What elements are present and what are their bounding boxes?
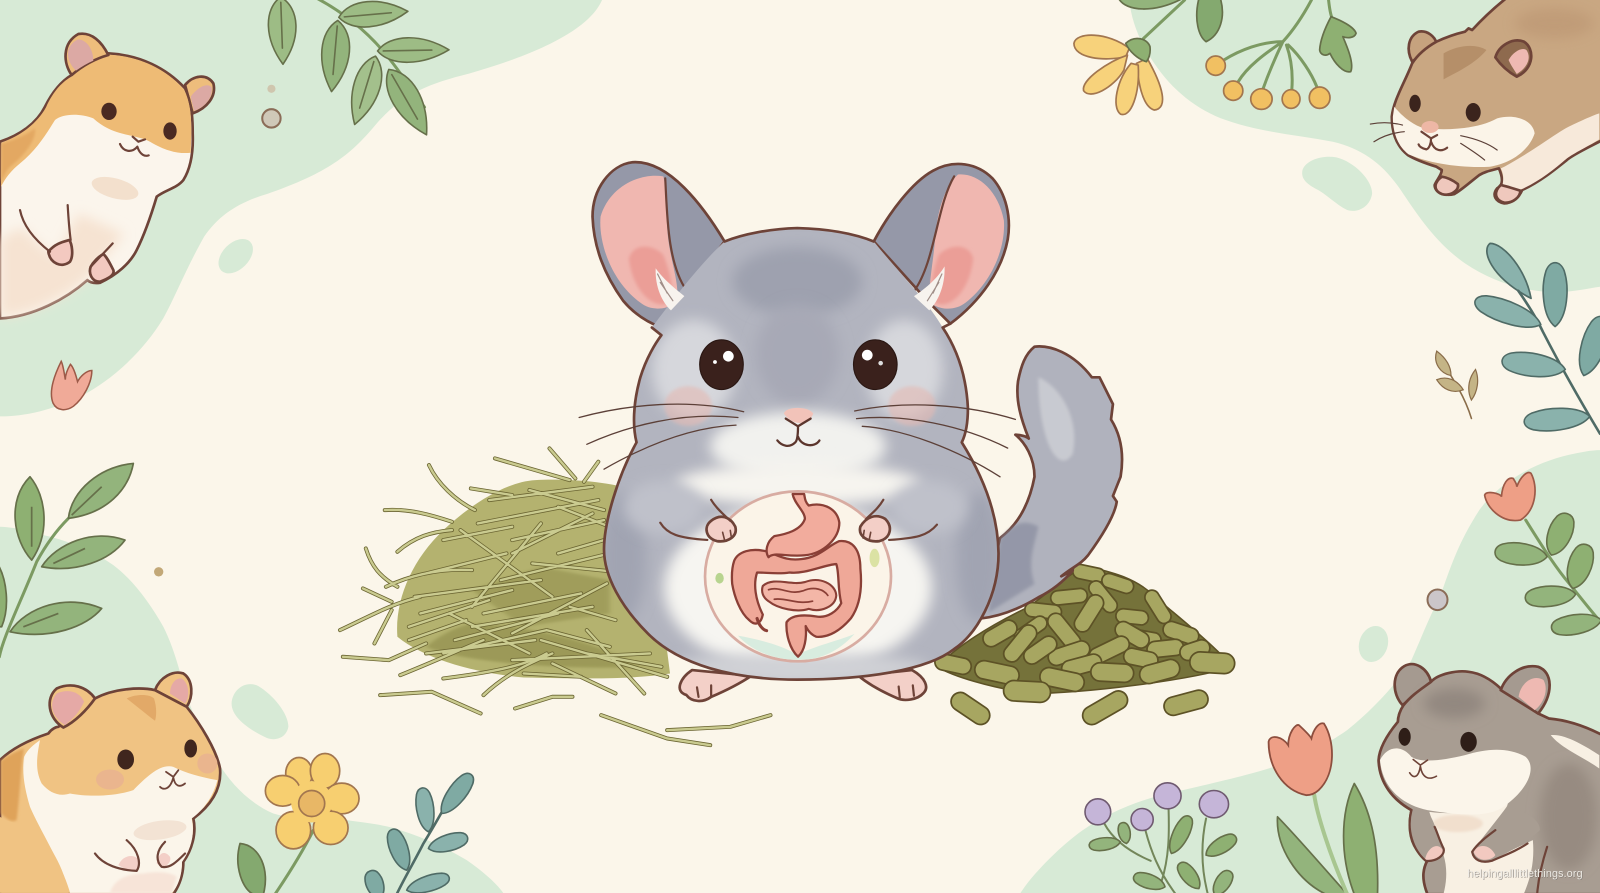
- mouth: [1410, 759, 1436, 778]
- left arm: [1410, 810, 1444, 861]
- icon: berry sprig: [1206, 0, 1330, 109]
- belly wash: [0, 213, 123, 317]
- plant: yellow flower: [238, 753, 359, 893]
- right arm: [1472, 805, 1540, 862]
- fur orange: [1, 55, 191, 187]
- flower stem: [1144, 0, 1185, 38]
- small intestine: [762, 580, 836, 610]
- ear right inner: [1509, 49, 1529, 74]
- green blob: bottom right: [1020, 450, 1600, 893]
- small green spot: lower left: [232, 684, 288, 739]
- belly tint: [1433, 815, 1483, 832]
- loose pellets: [948, 688, 1210, 728]
- paws: [118, 856, 140, 871]
- chinchilla: [579, 162, 1122, 701]
- paw right: [860, 516, 890, 541]
- body: [600, 228, 1002, 683]
- plant: purple sprigs: [1085, 783, 1240, 893]
- stomach: [767, 494, 839, 557]
- watermark: helpingalllittlethings.org: [1468, 869, 1583, 881]
- pellets: [933, 563, 1235, 703]
- paw left: [707, 517, 736, 541]
- eyes: [101, 103, 117, 120]
- paws: [48, 240, 72, 265]
- plant: teal branch: [362, 769, 478, 893]
- hay shadow: [426, 623, 638, 668]
- hamster: top right: [1370, 0, 1600, 203]
- head wash: [1424, 688, 1485, 718]
- belly circle: [705, 491, 891, 661]
- body: [0, 53, 193, 318]
- feet: [1435, 177, 1458, 195]
- leaf: [1197, 0, 1222, 42]
- hay shadow upper: [472, 567, 610, 627]
- green blob: top left: [0, 0, 602, 416]
- belly circle with digestive organs: [705, 491, 891, 661]
- body outline: [604, 228, 999, 680]
- watermark: helpingalllittlethings.org: [1467, 868, 1583, 880]
- straw highlights: [340, 448, 770, 745]
- back wash: [1515, 8, 1594, 38]
- cheek blush left: [664, 386, 712, 426]
- icon: yellow flower: [1074, 35, 1163, 115]
- back shade: [1, 748, 24, 821]
- ear left inner: [52, 691, 84, 725]
- foot right: [858, 670, 926, 700]
- body: [0, 689, 220, 893]
- muzzle: [1393, 107, 1535, 167]
- plant: left branch: [0, 463, 133, 657]
- ear right: [874, 164, 1009, 324]
- mouth: [777, 419, 819, 446]
- straw outlines: [340, 448, 770, 745]
- ear tuft right: [914, 266, 945, 310]
- teal leaf top of right branch: [1487, 243, 1531, 298]
- ear left: [1409, 31, 1436, 62]
- ear left: [1395, 664, 1431, 705]
- muzzle: [1380, 748, 1531, 815]
- ear right: [185, 77, 214, 113]
- belly: [1429, 803, 1533, 893]
- tail wash dark: [989, 523, 1038, 613]
- eyes: [1409, 95, 1421, 112]
- fur washes: [600, 247, 1002, 683]
- plant: right tulip branch: [1485, 473, 1600, 638]
- ear tuft left: [656, 268, 684, 310]
- head patch: [127, 695, 156, 721]
- nose blush: [1421, 121, 1439, 133]
- plant: big tulip: [1269, 723, 1378, 893]
- ear right inner: [1519, 678, 1546, 710]
- eyes: [117, 749, 134, 769]
- pellet pile: [933, 563, 1235, 728]
- chest mark: [89, 173, 141, 204]
- cheek blush: [96, 769, 124, 789]
- hay pile: [340, 448, 770, 745]
- mouth: [1419, 132, 1447, 150]
- green wash: [738, 634, 855, 660]
- green blob: top right: [1129, 0, 1600, 292]
- fur shade: [1, 128, 35, 182]
- belly line: [1537, 847, 1547, 893]
- small green spot: upper right: [1302, 157, 1372, 211]
- ear left: [50, 685, 95, 727]
- ear right: [1501, 666, 1550, 713]
- bottom right corner details: [1085, 473, 1600, 893]
- white chest: [23, 740, 217, 893]
- cheek blush right: [888, 386, 936, 426]
- ear inner right: [191, 85, 212, 111]
- small green spot: lower right: [1354, 622, 1393, 666]
- top right corner details: [1074, 0, 1600, 298]
- leaf: [1119, 0, 1183, 9]
- ear right inner: [170, 678, 188, 703]
- large intestine: [732, 541, 861, 657]
- decorative dot: [154, 567, 163, 576]
- body wash: [1540, 763, 1597, 870]
- decorative dots: top left: [262, 85, 281, 128]
- hamster: bottom right: [1379, 664, 1600, 893]
- arm lines: [95, 840, 185, 871]
- ear left: [66, 34, 108, 75]
- ear right: [1495, 40, 1531, 77]
- hamster: top left: [0, 34, 214, 318]
- tail wash light: [1038, 377, 1074, 461]
- belly: [1501, 113, 1599, 190]
- nose: [784, 408, 813, 423]
- foot left: [680, 670, 751, 701]
- paw tints: [1425, 846, 1443, 860]
- plant: right teal branch: [1471, 263, 1600, 434]
- icon: small sprig: [1436, 351, 1478, 418]
- body: [1392, 0, 1600, 203]
- green blob: bottom left: [0, 527, 503, 893]
- decorative dot: [1428, 589, 1448, 610]
- side stripe: [1551, 735, 1599, 768]
- arm outlines: [1410, 810, 1528, 862]
- icon: tulip bud left: [51, 361, 92, 410]
- eye right: [853, 340, 897, 390]
- appendix: [757, 618, 767, 631]
- lobed leaf: [1320, 0, 1356, 72]
- bottom left corner details: [0, 463, 478, 893]
- plant: top left branch: [267, 0, 449, 141]
- hamster: bottom left: [0, 673, 220, 893]
- eye left: [700, 340, 743, 390]
- small green spot: upper left: [212, 232, 260, 280]
- pile base: [937, 566, 1233, 693]
- head patch: [1444, 46, 1486, 79]
- tail: [981, 346, 1122, 618]
- eyes: [1399, 728, 1411, 746]
- chest mark: [132, 817, 188, 843]
- ear left: [593, 162, 725, 328]
- food specks: [715, 573, 724, 584]
- belly tint: [110, 872, 177, 893]
- whiskers: [1370, 123, 1497, 160]
- arm lines: [660, 500, 937, 540]
- hay mound: [397, 480, 670, 678]
- arm lines: [20, 205, 113, 267]
- mouth: [120, 137, 149, 156]
- ear right: [155, 673, 191, 707]
- lower flank: [0, 817, 68, 893]
- whiskers: [579, 404, 1015, 477]
- flower head: [265, 753, 359, 849]
- icon: coral tulip: [1485, 473, 1535, 521]
- ear inner left: [68, 39, 93, 71]
- body: [1379, 671, 1600, 893]
- mouth: [160, 770, 185, 789]
